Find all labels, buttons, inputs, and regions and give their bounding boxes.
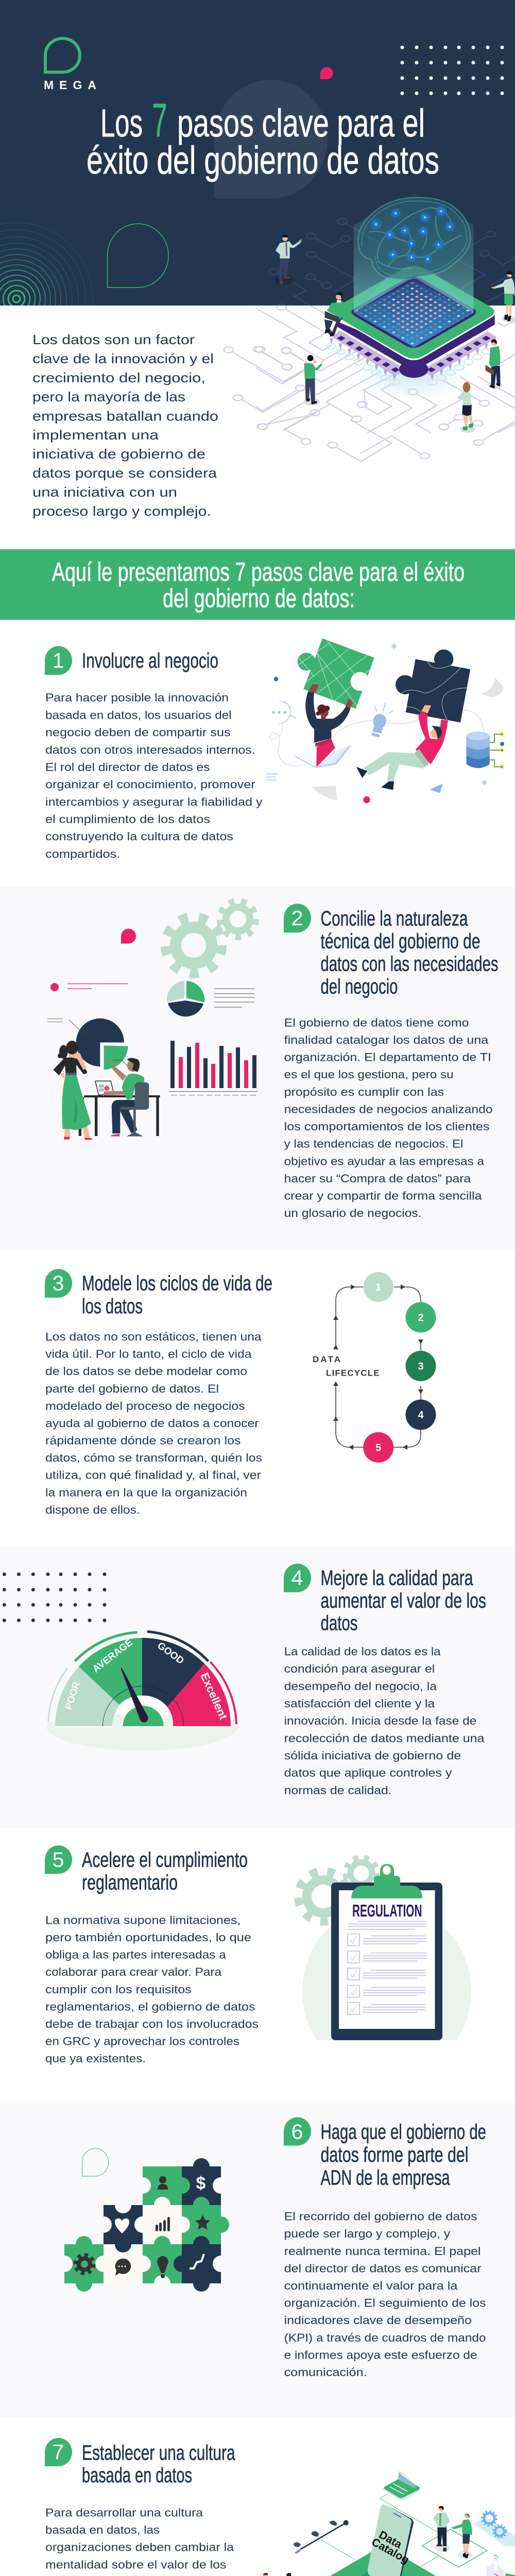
intro text: clave de la innovación y el (32, 351, 214, 366)
body: step 4: condición para asegurar el (284, 1663, 435, 1675)
body: step 3: dispone de ellos. (45, 1503, 140, 1516)
phone (368, 2504, 414, 2576)
small pie chart (167, 981, 254, 1016)
body: step 6: organización. El seguimiento de los (284, 2297, 486, 2310)
navy puzzle piece (396, 650, 470, 722)
gauge: data quality: GOOD (155, 1640, 186, 1667)
gauge: data quality: POOR (63, 1680, 82, 1711)
body: step 5: reglamentarios, el gobierno de datos (45, 2000, 255, 2013)
people diamonds (246, 2529, 487, 2576)
badge: step 4: 4 (291, 1566, 303, 1590)
heading: step 3 (82, 1272, 272, 1318)
illustration: gears (166, 901, 256, 973)
body: step 7: Para desarrollar una cultura (45, 2506, 203, 2519)
decorative outline drop (107, 224, 168, 287)
timeline arrow (294, 2520, 349, 2554)
gears and light strip (474, 2511, 515, 2546)
intro text (32, 332, 218, 519)
body: step 3: parte del gobierno de datos. El (45, 1382, 219, 1395)
body: step 5: obliga a las partes interesadas a (45, 1948, 227, 1961)
person: man lower left (303, 355, 323, 405)
man seated (104, 1058, 144, 1137)
body: step 2: necesidades de negocios analizando (284, 1103, 493, 1116)
body: step 1: Para hacer posible la innovación (45, 691, 229, 704)
intro text: empresas batallan cuando (32, 408, 218, 423)
diagram: data lifecycle (313, 1272, 436, 1463)
body: step 2: finalidad catalogar los datos de una (284, 1033, 489, 1046)
body: step 3: utiliza, con qué finalidad y, al final, ver (45, 1469, 261, 1482)
bar chart (169, 1041, 258, 1095)
illustration: people holding puzzle pieces (266, 638, 504, 803)
body: step 2: un glosario de negocios. (284, 1207, 422, 1219)
panel: step 6 (0, 2100, 515, 2417)
icon: heart (115, 2218, 129, 2233)
badge: step 5: 5 (53, 1848, 64, 1872)
body: step 1: intercambios y asegurar la fiabilidad y (45, 795, 263, 808)
title: Los (100, 101, 143, 145)
desk (79, 1095, 160, 1136)
body: step 6: puede ser largo y complejo, y (284, 2227, 450, 2240)
chip body (334, 266, 495, 378)
heading: step 7 (82, 2441, 235, 2487)
body: step 3: modelado del proceso de negocios (45, 1399, 245, 1412)
body: step 2 (284, 1016, 493, 1219)
icon: pink drop (320, 67, 333, 79)
body: step 2: es el que los gestiona, pero su (284, 1068, 454, 1081)
body: step 6: e informes apoya este esfuerzo de (284, 2348, 477, 2362)
person: presenter (274, 235, 302, 285)
body: step 1: construyendo la cultura de datos (45, 830, 233, 843)
body: step 4: satisfacción del cliente y la (284, 1697, 435, 1710)
icon: person (158, 2176, 168, 2190)
phone: Catalog (369, 2535, 411, 2566)
heading: step 5 (82, 1848, 248, 1894)
badge: step 2: 2 (291, 906, 303, 930)
heading: step 6 (320, 2120, 486, 2189)
people: upper pair (433, 2506, 472, 2560)
body: step 2: y las tendencias de negocios. El (284, 1138, 464, 1150)
heading: step 3: Modele los ciclos de vida de (82, 1272, 272, 1295)
phone: Data (377, 2528, 405, 2551)
panel: step 1 (45, 638, 504, 860)
body: step 2: hacer su “Compra de datos” para (284, 1172, 471, 1185)
illustration: regulation clipboard (298, 1857, 471, 2040)
heading: step 2: del negocio (320, 975, 398, 998)
body: step 6: del director de datos es comunicar (284, 2262, 482, 2275)
title (87, 94, 439, 182)
intro text: iniciativa de gobierno de (32, 446, 205, 462)
body: step 2: organización. El departamento de TI (284, 1051, 491, 1064)
central platform (322, 2546, 445, 2576)
icon: exclamation bulb (157, 2256, 168, 2278)
badge: step 2 (284, 904, 311, 933)
body: step 1: basada en datos, los usuarios del (45, 708, 232, 721)
mini platform with sliders (383, 2472, 420, 2500)
body: step 6 (284, 2210, 486, 2379)
diagram: data lifecycle: 2 (418, 1312, 424, 1324)
heading: step 5: reglamentario (82, 1871, 178, 1894)
body: step 5: La normativa supone limitaciones, (45, 1913, 241, 1927)
body: step 6: continuamente el valor para la (284, 2279, 458, 2292)
body: step 6: El recorrido del gobierno de datos (284, 2210, 477, 2223)
illustration: puzzle icons (56, 2158, 229, 2292)
chip glow (357, 349, 470, 400)
badge: step 7 (45, 2438, 72, 2466)
gauge: data quality: Excellent (198, 1671, 230, 1722)
intro text: proceso largo y complejo. (32, 503, 211, 519)
chip pins (327, 331, 497, 385)
panel: step 7 (45, 2438, 515, 2576)
banner: intro to 7 steps (0, 549, 515, 620)
big pie chart (47, 1019, 130, 1070)
body: step 1: El rol del director de datos es (45, 760, 210, 773)
small decorations (266, 643, 504, 803)
heading: step 5: Acelere el cumplimiento (82, 1848, 248, 1872)
regulation label: REGULATION (352, 1901, 422, 1920)
body: step 4: innovación. Inicia desde la fase de (284, 1715, 476, 1727)
body: step 4 (284, 1645, 485, 1797)
body: step 6: realmente nunca termina. El papel (284, 2245, 481, 2258)
body: step 7: organizaciones deben cambiar la (45, 2541, 234, 2554)
intro text: crecimiento del negocio, (32, 370, 205, 385)
icon: gear (75, 2255, 94, 2274)
decorative watermark drop (214, 80, 328, 198)
badge: step 1 (45, 646, 72, 675)
intro text: datos porque se considera (32, 465, 217, 481)
clip (351, 1864, 422, 1899)
illustration: people at desk and pie chart (47, 1019, 160, 1140)
icon: pink drop (121, 928, 136, 944)
body: step 3 (45, 1330, 262, 1516)
body: step 3: Los datos no son estáticos, tienen una (45, 1330, 262, 1343)
heading: step 7: basada en datos (82, 2463, 192, 2487)
body: step 1 (45, 691, 263, 860)
body: step 5: cumplir con los requisitos (45, 1983, 192, 1996)
diagram: data lifecycle: 4 (418, 1410, 424, 1421)
illustration: data catalog (246, 2472, 515, 2576)
person: woman right (491, 272, 514, 322)
logo: MEGA top (44, 39, 96, 92)
badge: step 3 (45, 1269, 72, 1298)
man lifting piece (356, 705, 448, 790)
person: man with briefcase (486, 339, 503, 389)
intro text: implementan una (32, 427, 159, 443)
body: step 4: normas de calidad. (284, 1784, 392, 1797)
body: step 1: organizar el conocimiento, promover (45, 778, 255, 791)
body: step 5: en GRC y aprovechar los controles (45, 2035, 239, 2048)
badge: step 4 (284, 1564, 311, 1592)
people: handshake (260, 2573, 296, 2576)
body: step 3: ayuda al gobierno de datos a conocer (45, 1417, 259, 1430)
badge: step 6: 6 (291, 2120, 303, 2143)
database (467, 732, 504, 769)
chip screen (350, 278, 477, 349)
badge: step 3: 3 (53, 1272, 64, 1295)
title: pasos clave para el (177, 101, 425, 145)
heading: step 3: los datos (82, 1294, 143, 1318)
body: step 2: crear y compartir de forma sencilla (284, 1189, 482, 1202)
body: step 3: la manera en la que la organización (45, 1486, 247, 1499)
body: step 1: el cumplimiento de los datos (45, 812, 210, 825)
checklist (348, 1922, 425, 2014)
icon: signal bars (156, 2217, 170, 2231)
icon: star (195, 2215, 210, 2230)
green puzzle piece (298, 638, 374, 709)
body: step 4: desempeño del negocio, la (284, 1680, 437, 1692)
decorative concentric rings (0, 223, 93, 306)
woman lifting piece (295, 684, 353, 768)
person: woman bottom (458, 382, 475, 433)
diagram: data lifecycle: 1 (375, 1282, 381, 1293)
body: step 3: rápidamente dónde se crearon los (45, 1434, 241, 1447)
gray connecting lines (270, 710, 484, 766)
intro text: Los datos son un factor (32, 332, 195, 347)
intro text: una iniciativa con un (32, 484, 177, 500)
glass prism (354, 192, 473, 313)
body: step 2: objetivo es ayudar a las empresas a (284, 1155, 485, 1167)
body: step 3: datos, cómo se transforman, quién los (45, 1451, 262, 1464)
diagram: data lifecycle: DATA (313, 1354, 340, 1364)
connector lines (305, 2494, 515, 2576)
dot grid: header (401, 45, 504, 95)
body: step 1: negocio deben de compartir sus (45, 726, 231, 739)
gauge needle (121, 1668, 148, 1722)
panel: step 3 (45, 1269, 436, 1516)
icon: dollar: $ (196, 2174, 206, 2193)
panel: step 2 (0, 887, 515, 1251)
body: step 3: vida útil. Por lo tanto, el ciclo de vida (45, 1348, 252, 1361)
heading: step 1: Involucre al negocio (82, 649, 218, 672)
body: step 7: mentalidad sobre el valor de los (45, 2558, 226, 2571)
badge: step 6 (284, 2117, 311, 2145)
badge: step 5 (45, 1845, 72, 1874)
chair (120, 1082, 149, 1137)
heading: step 6: datos forme parte del (320, 2143, 469, 2166)
laptop (95, 1081, 114, 1095)
title: 7 (152, 94, 167, 147)
body: step 4: recolección de datos mediante una (284, 1732, 485, 1744)
server platform (473, 2555, 515, 2576)
body: step 4: datos que aplique controles y (284, 1767, 452, 1780)
heading: step 6: ADN de la empresa (320, 2165, 450, 2189)
brain (358, 197, 470, 280)
gauge: data quality (46, 1632, 238, 1751)
clipboard board (331, 1883, 442, 2040)
panel: header background (0, 0, 515, 306)
pink legend marker (50, 983, 128, 991)
speech bubble (272, 701, 296, 724)
body: step 5: debe de trabajar con los involucrados (45, 2018, 259, 2030)
body: step 7: basada en datos, las (45, 2523, 160, 2536)
badge: step 7: 7 (53, 2440, 64, 2464)
body: step 4: sólida iniciativa de gobierno de (284, 1749, 461, 1762)
heading: step 4: datos (320, 1611, 357, 1635)
panel: step 4 (0, 1547, 515, 1828)
body: step 6: (KPI) a través de cuadros de mando (284, 2331, 486, 2344)
heading: step 4 (320, 1566, 486, 1635)
body: step 2: propósito es cumplir con las (284, 1086, 444, 1098)
logo: MEGA top: MEGA (44, 78, 96, 92)
body: step 1: compartidos. (45, 848, 120, 860)
body: step 5: pero también oportunidades, lo que (45, 1931, 251, 1944)
icon: chat (115, 2259, 131, 2276)
body: step 5 (45, 1913, 259, 2065)
body: step 1: datos con otros interesados internos. (45, 743, 255, 756)
decorative outline drop (82, 2148, 108, 2176)
intro text: pero la mayoría de las (32, 389, 185, 404)
woman standing (53, 1041, 92, 1140)
gauge: data quality: AVERAGE (91, 1637, 135, 1675)
diagram: data lifecycle: 5 (375, 1443, 381, 1454)
body: step 6: indicadores clave de desempeño (284, 2314, 472, 2327)
badge: step 1: 1 (53, 649, 64, 672)
icon: trend line (190, 2254, 204, 2268)
diagram: data lifecycle: 3 (418, 1361, 424, 1372)
body: step 5: colaborar para crear valor. Para (45, 1965, 222, 1978)
dot grid: step 4 (3, 1572, 106, 1622)
person: seated with laptop (324, 292, 347, 336)
diagram: data lifecycle: LIFECYCLE (326, 1368, 380, 1378)
body: step 3: de los datos se debe modelar como (45, 1365, 247, 1378)
banner: intro to 7 steps: del gobierno de datos: (163, 583, 355, 613)
body: step 5: que ya existentes. (45, 2052, 146, 2065)
body: step 2: El gobierno de datos tiene como (284, 1016, 469, 1029)
panel: step 5 (45, 1845, 471, 2065)
heading: step 2 (320, 907, 499, 998)
light bulb (371, 702, 393, 738)
body: step 7 (45, 2506, 243, 2576)
body: step 6: comunicación. (284, 2366, 367, 2379)
illustration: circuit chip and brain (224, 192, 515, 462)
heading: step 7: Establecer una cultura (82, 2441, 235, 2465)
gears behind clipboard (298, 1857, 377, 1922)
body: step 2: los comportamientos de los clientes (284, 1120, 490, 1133)
body: step 4: La calidad de los datos es la (284, 1645, 441, 1658)
